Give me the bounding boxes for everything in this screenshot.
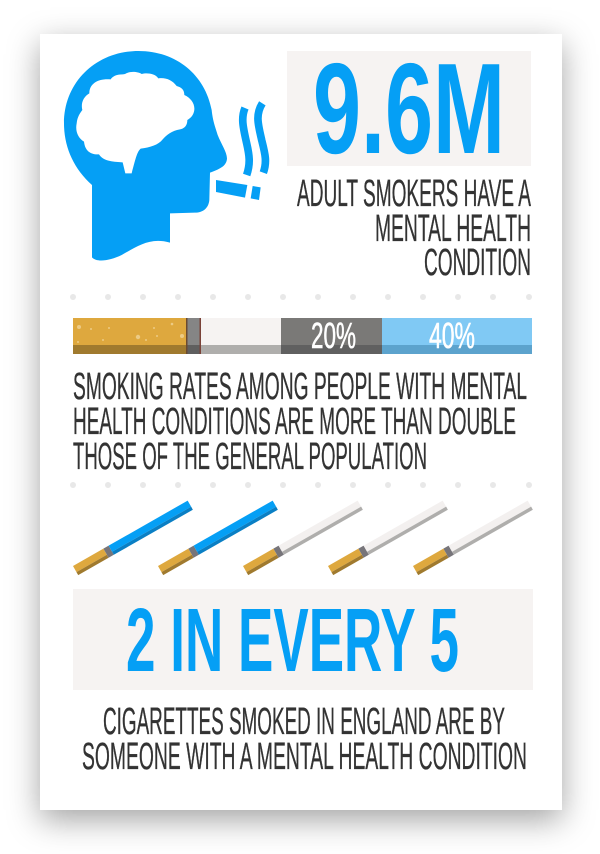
band: [186, 318, 202, 354]
white cigarette 4: [328, 501, 448, 575]
panel background: [73, 589, 533, 690]
smoke: [243, 103, 265, 175]
filter: [73, 318, 187, 354]
text: smoking rates: [73, 366, 527, 478]
head silhouette: [64, 51, 227, 260]
20% segment: [281, 315, 382, 356]
40% segment: [382, 315, 532, 356]
20% segment: 20%: [311, 315, 356, 356]
40% segment: 40%: [429, 315, 475, 356]
panel: 9.6M: [287, 37, 531, 181]
chart: cigarette bar: [73, 315, 532, 356]
text: adult smokers: [297, 173, 531, 284]
number: 9.6M: [313, 37, 505, 181]
white segment: [201, 318, 281, 354]
white cigarette 5: [413, 501, 533, 575]
white cigarette 3: [243, 501, 363, 575]
cigarette: [216, 180, 261, 200]
panel: 2 in every 5: [73, 589, 533, 691]
icon: head with brain smoking: [64, 51, 265, 260]
text: cigarettes smoked: [82, 701, 527, 778]
blue cigarette 1: [73, 501, 193, 575]
card background: [40, 34, 562, 810]
blue cigarette 2: [158, 501, 278, 575]
panel background: [287, 51, 531, 166]
brain: [76, 72, 194, 173]
cigarettes row: [73, 501, 533, 575]
